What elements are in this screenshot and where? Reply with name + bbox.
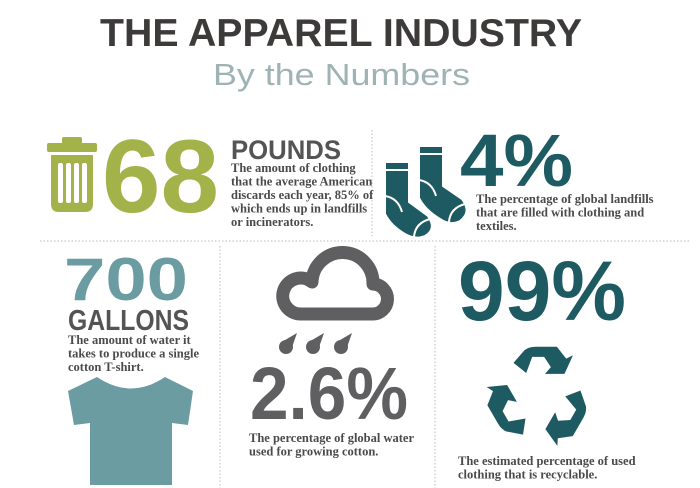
text: water description: used for growing cotton.: [249, 444, 378, 458]
icon: rain cloud: [279, 252, 387, 354]
text: water description: The percentage of global water: [249, 431, 414, 445]
text: landfill description: textiles.: [476, 219, 517, 233]
text: recyclable description: The estimated percentage of used: [458, 454, 636, 468]
text: pounds description: discards each year, 85% of: [231, 188, 374, 202]
text: recyclable description: clothing that is recyclable.: [458, 468, 597, 482]
big number 4%: 4%: [460, 119, 573, 202]
icon: recycle: [479, 347, 594, 450]
text: pounds description: The amount of clothing: [231, 161, 356, 175]
panel: 99% recyclable: [458, 244, 636, 482]
text: landfill description: that are filled with clothing and: [476, 206, 644, 220]
icon: t-shirt: [68, 377, 193, 485]
icon: socks: [385, 146, 467, 238]
text: pounds description: which ends up in landfills: [231, 202, 367, 216]
subtitle: By the Numbers: [213, 57, 470, 92]
big number 99%: 99%: [458, 244, 626, 338]
big number 2.6%: 2.6%: [250, 352, 408, 435]
heading: pounds: POUNDS: [231, 135, 341, 165]
text: water per t-shirt: cotton T-shirt.: [68, 360, 144, 374]
text: landfill description: The percentage of global landfills: [476, 192, 654, 206]
panel: 68 pounds: [47, 119, 374, 235]
big number 700: 700: [64, 246, 188, 313]
panel: 4% landfills: [385, 119, 654, 238]
text: water per t-shirt: takes to produce a single: [68, 346, 199, 360]
text: pounds description: or incinerators.: [231, 215, 313, 229]
text: water per t-shirt: The amount of water it: [68, 333, 192, 347]
heading: gallons: GALLONS: [68, 305, 189, 337]
title: THE APPAREL INDUSTRY: [100, 12, 582, 55]
icon: trash can: [47, 137, 97, 212]
big number 68: 68: [102, 119, 219, 235]
panel: 700 gallons: [64, 246, 199, 485]
panel: 2.6% water: [249, 252, 414, 458]
text: pounds description: that the average American: [231, 174, 372, 188]
